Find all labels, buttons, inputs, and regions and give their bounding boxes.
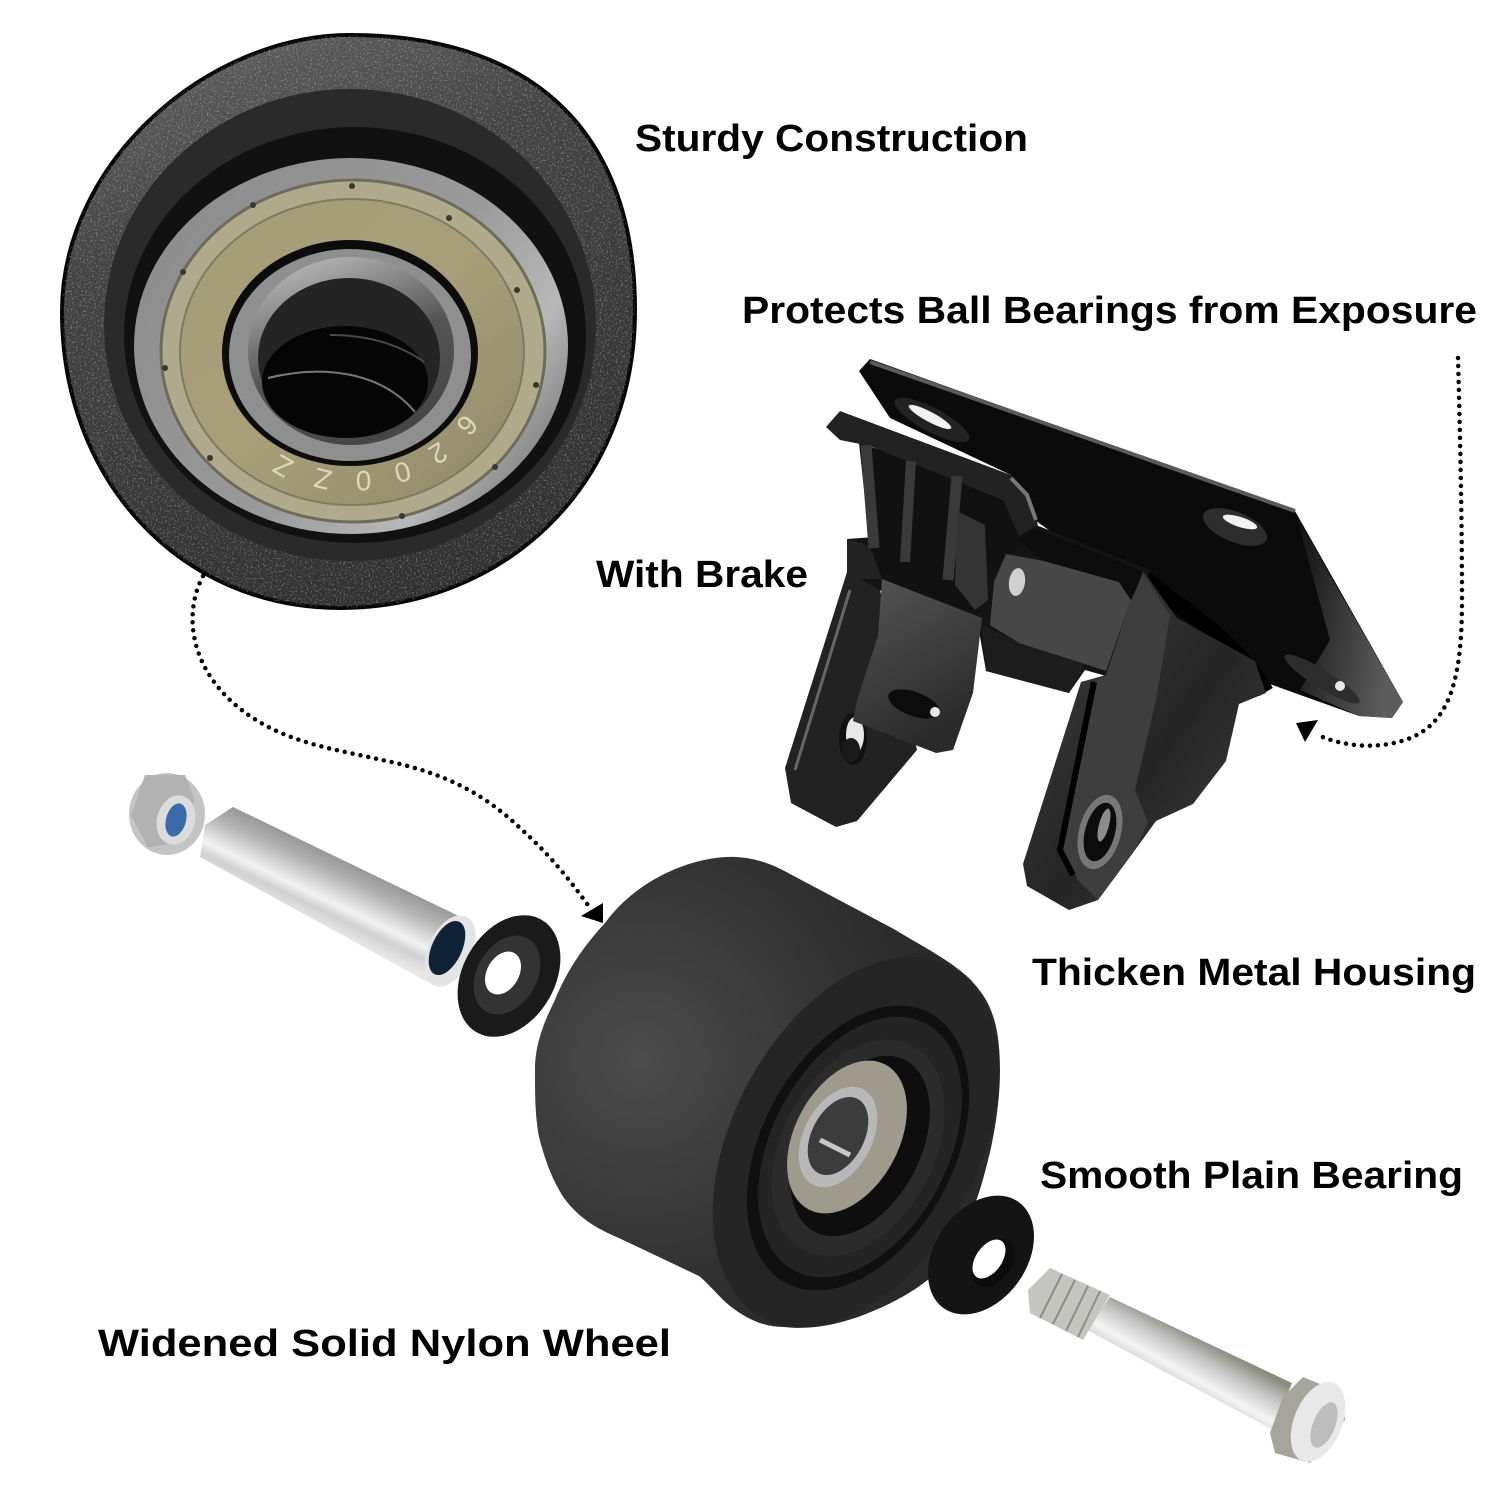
wheel groove ring (701, 968, 1015, 1328)
heading: Thicken Metal Housing: Thicken Metal Housing (1032, 952, 1476, 994)
bearing shield (763, 1040, 931, 1234)
bolt shank (1087, 1297, 1292, 1430)
inner race black line (222, 240, 478, 466)
left prong edge highlight (795, 590, 850, 770)
wheel recess ring (717, 982, 1003, 1312)
inner race bevel (248, 257, 454, 445)
heading: Widened Solid Nylon Wheel: Widened Solid Nylon Wheel (98, 1323, 671, 1365)
icon: lock nut (129, 773, 205, 855)
shield rivets (162, 183, 539, 519)
bore depth (262, 326, 428, 438)
flange curve (1140, 575, 1266, 692)
bearing inner race (783, 1073, 893, 1201)
arm inner edge line (1060, 682, 1094, 875)
heading: Sturdy Construction: Sturdy Construction (635, 118, 1028, 160)
swivel plate and ribs (826, 411, 1038, 614)
icon: right washer (906, 1175, 1056, 1335)
tyre surface speckle (60, 35, 640, 610)
icon: nylon wheel (535, 857, 1058, 1375)
icon: spacer tube (200, 807, 486, 995)
left prong (785, 572, 917, 827)
wheel front face (654, 909, 1058, 1375)
wheel hub (736, 1010, 980, 1286)
bore highlight (820, 1140, 850, 1155)
brake tab (853, 579, 982, 753)
slot: upper right (1198, 500, 1272, 554)
mounting plate right edge (1297, 518, 1403, 718)
bracket top recess (1020, 529, 1143, 600)
mounting plate top edge highlight (870, 362, 1295, 511)
arm panel (1062, 575, 1170, 900)
bolt head face (1280, 1374, 1356, 1470)
icon: bearing close-up circle (60, 33, 637, 610)
bolt thread ridges (1040, 1274, 1100, 1337)
bolt thread (1028, 1268, 1110, 1340)
icon: metal housing with brake (785, 359, 1403, 910)
arrow: dotted from top label to housing (1296, 358, 1462, 746)
main arm and dome (1023, 571, 1266, 910)
bearing shield face (180, 199, 524, 505)
bearing shield rim (161, 180, 545, 522)
rivet (1007, 567, 1027, 597)
bore reflected thread lines (268, 335, 424, 412)
bearing cavity (761, 1032, 959, 1260)
dark backing joining upper parts (847, 525, 1150, 693)
inner race silver (229, 249, 471, 461)
bearing outer silver race (134, 158, 568, 534)
tyre groove (124, 127, 586, 543)
bore (258, 278, 440, 438)
bolt head (1270, 1377, 1345, 1463)
left prong hole (839, 713, 867, 765)
arrow: dotted from bearing close-up to wheel (193, 576, 603, 923)
under bridge (982, 625, 1085, 693)
engraved bearing code: 6200ZZ (272, 416, 476, 491)
icon: axle bolt (1028, 1268, 1356, 1470)
arm axle hole (1070, 790, 1130, 874)
slot: upper left (889, 390, 975, 450)
wheel tread (535, 857, 1000, 1328)
heading: Smooth Plain Bearing: Smooth Plain Bearing (1040, 1155, 1463, 1197)
mounting plate (859, 359, 1403, 718)
heading: With Brake: With Brake (596, 554, 808, 596)
center bracket (990, 554, 1131, 671)
slot: lower right (1280, 648, 1364, 710)
brake tab slot (885, 683, 943, 725)
heading: Protects Ball Bearings from Exposure: Protects Ball Bearings from Exposure (742, 290, 1477, 332)
tyre outer edge (62, 35, 635, 608)
tyre chamfer (104, 89, 596, 561)
bearing bore (795, 1087, 881, 1185)
icon: left washer (437, 897, 581, 1055)
